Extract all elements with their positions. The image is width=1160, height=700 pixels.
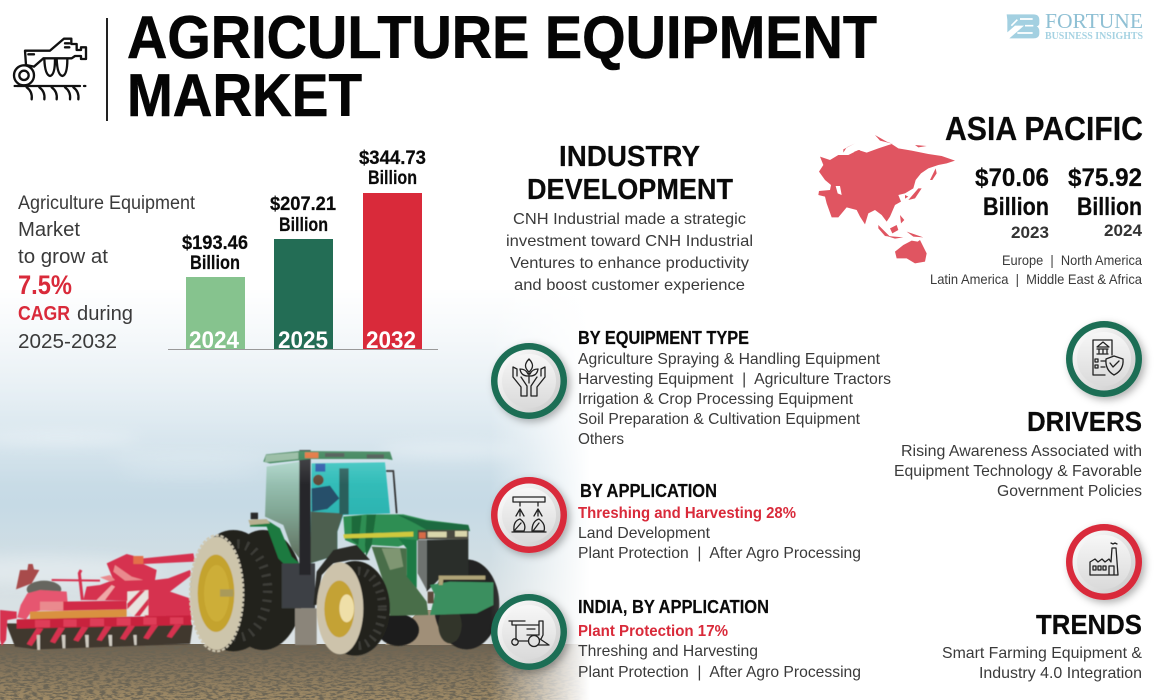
other regions: Europe | North America bbox=[1002, 252, 1142, 268]
title bbox=[127, 4, 877, 129]
logo text: FORTUNE bbox=[1045, 9, 1143, 33]
brand logo: Fortune Business Insights bbox=[1007, 9, 1143, 42]
industry development: INDUSTRY bbox=[559, 141, 700, 173]
tractor and implement bbox=[0, 450, 499, 656]
bar 2025: 2025 bbox=[278, 327, 328, 354]
equipment type text: Irrigation & Crop Processing Equipment bbox=[578, 391, 854, 408]
2024 value: Billion bbox=[1077, 193, 1142, 221]
drivers text bbox=[894, 406, 1142, 500]
growth text block: 7.5% bbox=[18, 270, 72, 300]
other regions: Latin America | Middle East & Africa bbox=[930, 271, 1142, 287]
far front wheel and center wheel bbox=[282, 559, 499, 649]
2023 value bbox=[975, 164, 1049, 242]
bar 2024: $193.46 bbox=[182, 233, 248, 254]
icon badge: combine harvester bbox=[491, 594, 567, 670]
growth text block: during bbox=[77, 303, 133, 325]
bar 2032: 2032 bbox=[366, 327, 416, 354]
drivers text: Rising Awareness Associated with bbox=[901, 443, 1142, 460]
trends text bbox=[942, 609, 1142, 682]
red implement bbox=[0, 553, 195, 650]
industry development: Ventures to enhance productivity bbox=[510, 255, 749, 272]
india by application text bbox=[578, 597, 861, 681]
bar chart bbox=[168, 148, 438, 354]
industry development: investment toward CNH Industrial bbox=[506, 233, 753, 250]
logo icon: tillage implement bbox=[14, 39, 86, 99]
map: Asia Pacific bbox=[818, 135, 955, 263]
white fade at right bbox=[490, 285, 590, 700]
trends text: Smart Farming Equipment & bbox=[942, 645, 1142, 662]
bar 2025: Billion bbox=[279, 215, 328, 236]
grille and lights bbox=[418, 530, 468, 592]
Asia Pacific stats bbox=[930, 110, 1143, 287]
by application text bbox=[578, 481, 861, 562]
soil behind front wheels bbox=[385, 610, 470, 645]
equipment type text bbox=[578, 328, 891, 448]
bar 2024: Billion bbox=[190, 253, 240, 274]
bar 2024 bbox=[182, 233, 248, 354]
brand logo: Fortune Business Insights: BUSINESS INSIGHTS bbox=[1045, 31, 1143, 42]
title: MARKET bbox=[127, 62, 362, 129]
bar 2032: $344.73 bbox=[359, 148, 426, 169]
equipment type text: Others bbox=[578, 431, 624, 448]
by application text: Threshing and Harvesting 28% bbox=[578, 505, 796, 522]
equipment type text: BY EQUIPMENT TYPE bbox=[578, 328, 749, 348]
by application text: Land Development bbox=[578, 525, 711, 542]
2023 value: 2023 bbox=[1011, 223, 1049, 242]
hood and engine bbox=[343, 514, 470, 616]
title: AGRICULTURE EQUIPMENT bbox=[127, 4, 877, 71]
bar 2032 bbox=[359, 148, 426, 354]
trends text: TRENDS bbox=[1036, 609, 1142, 640]
axis bbox=[168, 349, 438, 350]
growth text block: CAGR bbox=[18, 303, 70, 325]
far rear dual wheel bbox=[223, 530, 303, 650]
bar 2032: Billion bbox=[368, 168, 417, 189]
by application text: BY APPLICATION bbox=[580, 481, 717, 501]
2024 value bbox=[1068, 164, 1143, 240]
soil texture bbox=[0, 644, 620, 700]
2024 value: $75.92 bbox=[1068, 164, 1142, 192]
white fade at top bbox=[0, 285, 620, 485]
front wheel and fender bbox=[313, 545, 390, 656]
equipment type text: Soil Preparation & Cultivation Equipment bbox=[578, 411, 861, 428]
icon badge: crop sprayer bbox=[491, 477, 567, 553]
industry development: DEVELOPMENT bbox=[527, 174, 733, 206]
2023 value: Billion bbox=[983, 193, 1049, 221]
india by application text: Plant Protection | After Agro Processing bbox=[578, 664, 861, 681]
logo mark bbox=[1007, 14, 1039, 38]
rear fender bbox=[248, 513, 299, 563]
drivers text: Equipment Technology & Favorable bbox=[894, 463, 1142, 480]
other regions bbox=[930, 252, 1142, 287]
growth text block: Agriculture Equipment bbox=[18, 193, 196, 214]
cab bbox=[263, 450, 397, 575]
icon badge: hands and plant bbox=[491, 343, 567, 419]
rear wheel bbox=[190, 530, 276, 651]
divider bar bbox=[106, 18, 108, 121]
trends text: Industry 4.0 Integration bbox=[979, 665, 1142, 682]
2023 value: $70.06 bbox=[975, 164, 1049, 192]
background photo: tractor in field bbox=[0, 285, 630, 700]
clouds bbox=[0, 431, 520, 584]
drivers text: DRIVERS bbox=[1027, 406, 1142, 437]
field soil bbox=[0, 644, 620, 700]
bar 2025: $207.21 bbox=[270, 194, 336, 215]
bar 2025 bbox=[270, 194, 336, 354]
india by application text: Plant Protection 17% bbox=[578, 623, 728, 640]
Asia Pacific stats: ASIA PACIFIC bbox=[945, 110, 1143, 147]
industry development: CNH Industrial made a strategic bbox=[513, 211, 746, 228]
drivers text: Government Policies bbox=[997, 483, 1142, 500]
growth text block: to grow at bbox=[18, 246, 108, 268]
india by application text: INDIA, BY APPLICATION bbox=[578, 597, 769, 617]
industry development bbox=[506, 141, 753, 294]
front weight bbox=[428, 576, 493, 615]
industry development: and boost customer experience bbox=[514, 277, 745, 294]
growth text block: Market bbox=[18, 219, 80, 241]
equipment type text: Agriculture Spraying & Handling Equipment bbox=[578, 351, 881, 368]
icon badge: policy document bbox=[1066, 321, 1142, 397]
2024 value: 2024 bbox=[1104, 221, 1143, 240]
by application text: Plant Protection | After Agro Processing bbox=[578, 545, 861, 562]
growth text block: 2025-2032 bbox=[18, 331, 117, 353]
icon badge: factory bbox=[1066, 524, 1142, 600]
sky bbox=[0, 290, 620, 650]
equipment type text: Harvesting Equipment | Agriculture Tractors bbox=[578, 371, 891, 388]
growth text block bbox=[18, 193, 196, 353]
india by application text: Threshing and Harvesting bbox=[578, 643, 758, 660]
bar 2024: 2024 bbox=[189, 327, 240, 354]
